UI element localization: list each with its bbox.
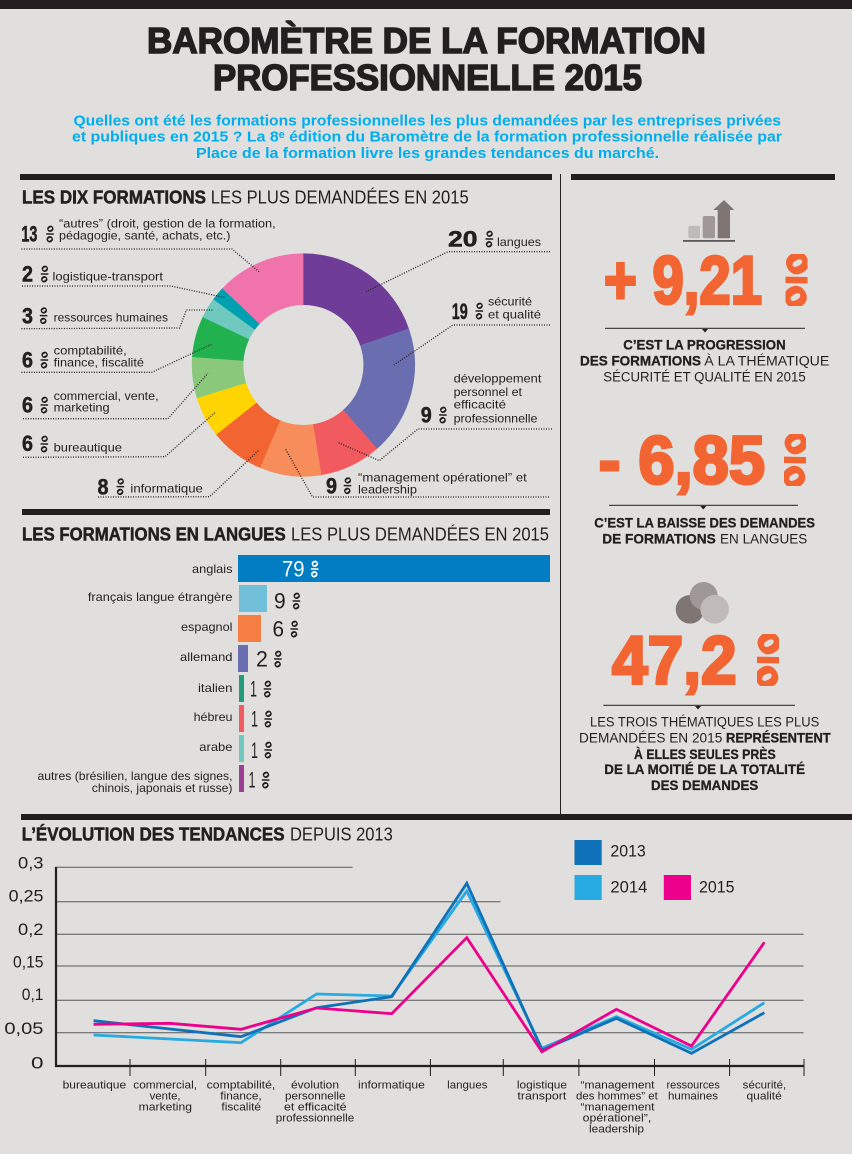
x axis labels: leadership: [589, 1123, 644, 1135]
callout: autres 13 %: “autres” (droit, gestion de la formation,: [59, 217, 276, 231]
callout: management opérationel 9 %: leadership: [358, 483, 417, 497]
callout: langues 20 %: 20: [448, 227, 478, 252]
legend: 2015: [699, 878, 734, 897]
callout: baisse: EN LANGUES: [720, 531, 807, 546]
x axis labels: et efficacité: [284, 1101, 347, 1113]
figure: 47,2 %: %: [727, 623, 805, 699]
callout: logistique-transport 2 %: logistique-transport: [52, 270, 164, 284]
callout: commercial 6 %: 6: [22, 392, 33, 417]
legend: 2013: [610, 842, 646, 861]
x axis labels: professionnelle: [276, 1112, 354, 1124]
callout: comptabilité 6 %: 6: [22, 347, 33, 372]
bar: espagnol: espagnol: [181, 620, 232, 634]
figure: +9,21 %: %: [756, 243, 834, 319]
series 2013: [94, 883, 764, 1053]
callout: développement personnel 9 %: professionnelle: [454, 411, 538, 425]
bar: arabe: 1: [251, 738, 258, 763]
callout: développement personnel 9 %: développement: [454, 372, 542, 386]
figure: -6,85 %: %: [754, 423, 832, 499]
callout: baisse: C’EST LA BAISSE DES DEMANDES: [594, 515, 815, 530]
bar: hébreu: [194, 705, 272, 732]
bar: hébreu: %: [256, 707, 280, 731]
bar: italien: [198, 675, 272, 702]
x axis labels: vente,: [150, 1090, 181, 1102]
bar: italien: %: [255, 677, 279, 701]
y axis labels: 0,25: [9, 887, 43, 906]
intro text: et publiques en 2015 ? La 8ᵉ édition du Baromètre de la formation professionnelle réalisée par: [72, 129, 782, 146]
bar: autres: 1: [248, 768, 256, 793]
heading: formations en langues: LES PLUS DEMANDÉES EN 2015: [291, 525, 549, 545]
bar: autres: [38, 765, 278, 795]
figure: -6,85 %: - 6,85: [599, 422, 765, 498]
title: BAROMÈTRE DE LA FORMATION: [147, 20, 706, 61]
callout: comptabilité 6 %: [21, 344, 211, 372]
callout: management opérationel 9 %: 9: [326, 473, 337, 498]
legend: [574, 840, 734, 900]
series 2014: [94, 891, 764, 1049]
callout: progression: [580, 328, 829, 385]
callout: comptabilité 6 %: finance, fiscalité: [54, 356, 144, 370]
callout: commercial 6 %: commercial, vente,: [54, 389, 159, 403]
donut chart: [182, 244, 425, 486]
x axis labels: informatique: [358, 1079, 425, 1091]
intro text: [72, 113, 782, 162]
callout: langues 20 %: langues: [497, 235, 541, 249]
x axis labels: commercial,: [133, 1079, 197, 1091]
bar: français langue étrangère: [88, 585, 308, 613]
title: PROFESSIONNELLE 2015: [213, 57, 642, 98]
x axis labels: bureautique: [63, 1079, 126, 1091]
y axis labels: 0,2: [18, 920, 44, 939]
bar: anglais: 79: [282, 557, 305, 582]
panel: language formations: [22, 525, 550, 795]
heading: évolution des tendances: DEPUIS 2013: [290, 825, 393, 845]
callout: autres 13 %: pédagogie, santé, achats, etc.): [59, 229, 230, 243]
x axis labels: personnelle: [285, 1090, 346, 1102]
callout: trois thématiques: DES DEMANDES: [651, 778, 758, 793]
x axis labels: langues: [447, 1079, 488, 1091]
panel: key figures: [579, 200, 834, 793]
bar: anglais: [192, 555, 550, 582]
y axis labels: 0,15: [13, 953, 44, 972]
callout: autres 13 %: 13: [21, 222, 37, 247]
callout: bureautique 6 %: 6: [22, 431, 33, 456]
x axis labels: fiscalité: [221, 1101, 261, 1113]
panel: trends since 2013: [4, 824, 804, 1135]
x axis labels: humaines: [668, 1090, 719, 1102]
figure: 47,2 %: 47,2: [612, 622, 737, 698]
callout: commercial 6 %: %: [32, 393, 56, 417]
heading: dix formations: LES PLUS DEMANDÉES EN 2015: [211, 187, 469, 207]
callout: management opérationel 9 %: [286, 449, 549, 498]
callout: autres 13 %: [21, 217, 276, 272]
callout: baisse: [594, 505, 815, 546]
x axis labels: sécurité,: [743, 1079, 786, 1091]
bar: allemand: %: [265, 647, 290, 671]
y axis labels: 0,1: [22, 985, 44, 1004]
callout: progression: C’EST LA PROGRESSION: [623, 337, 786, 352]
callout: sécurité et qualité 19 %: 19: [452, 299, 468, 324]
heading: évolution des tendances: L’ÉVOLUTION DES TENDANCES: [22, 824, 285, 845]
bar: espagnol: %: [282, 617, 306, 641]
callout: commercial 6 %: [22, 373, 208, 419]
series 2015: [94, 938, 764, 1052]
callout: sécurité et qualité 19 %: [394, 295, 550, 365]
callout: informatique 8 %: informatique: [130, 482, 203, 496]
y axis labels: 0,05: [4, 1019, 43, 1038]
y axis labels: 0: [31, 1053, 44, 1072]
bar: hébreu: 1: [251, 707, 258, 732]
callout: sécurité et qualité 19 %: et qualité: [488, 308, 541, 322]
bar: anglais: %: [302, 557, 327, 581]
heading: dix formations: [22, 187, 469, 207]
callout: sécurité et qualité 19 %: %: [467, 299, 491, 323]
intro text: Quelles ont été les formations professionnelles les plus demandées par les entreprises privées: [74, 113, 781, 130]
callout: trois thématiques: [579, 705, 831, 793]
callout: développement personnel 9 %: %: [430, 403, 455, 427]
callout: logistique-transport 2 %: %: [32, 262, 57, 286]
callout: progression: DES FORMATIONS: [580, 354, 701, 369]
y axis labels: 0,3: [18, 853, 44, 872]
bar: français langue étrangère: français langue étrangère: [88, 590, 233, 604]
x axis labels: des hommes” et: [576, 1090, 658, 1102]
callout: logistique-transport 2 %: [22, 266, 224, 298]
figure: -6,85 %: [600, 434, 806, 496]
x axis labels: évolution: [291, 1079, 339, 1091]
callout: ressources humaines 3 %: %: [31, 304, 56, 328]
bar: italien: 1: [250, 677, 257, 702]
bar: arabe: arabe: [199, 740, 233, 754]
legend: 2014: [610, 878, 647, 897]
callout: commercial 6 %: marketing: [54, 401, 110, 415]
bar: français langue étrangère: %: [284, 589, 308, 613]
callout: informatique 8 %: %: [108, 475, 132, 499]
heading: formations en langues: [22, 525, 549, 545]
callout: autres 13 %: %: [38, 222, 62, 246]
bar: arabe: %: [256, 738, 280, 762]
bar: autres: chinois, japonais et russe): [92, 781, 232, 795]
icon: three circles: [676, 582, 729, 624]
title: [147, 20, 706, 98]
callout: logistique-transport 2 %: 2: [22, 262, 33, 287]
line chart: [4, 853, 804, 1135]
x axis labels: comptabilité,: [207, 1079, 275, 1091]
callout: comptabilité 6 %: %: [32, 348, 56, 372]
callout: baisse: DE FORMATIONS: [602, 531, 716, 546]
callout: développement personnel 9 %: efficacité: [454, 398, 506, 412]
callout: progression: À LA THÉMATIQUE: [704, 354, 829, 369]
bar: anglais: anglais: [192, 562, 232, 576]
callout: trois thématiques: REPRÉSENTENT: [726, 731, 831, 746]
callout: progression: SÉCURITÉ ET QUALITÉ EN 2015: [603, 370, 806, 385]
x axis labels: “management: [580, 1079, 654, 1091]
callout: trois thématiques: LES TROIS THÉMATIQUES LES PLUS: [590, 715, 819, 730]
callout: bureautique 6 %: bureautique: [54, 441, 122, 455]
panel: top ten formations: [21, 187, 552, 499]
callout: langues 20 %: %: [477, 227, 501, 251]
bar: espagnol: [181, 615, 306, 642]
callout: ressources humaines 3 %: 3: [22, 303, 33, 328]
callout: trois thématiques: DE LA MOITIÉ DE LA TOTALITÉ: [604, 762, 805, 777]
callout: ressources humaines 3 %: ressources humaines: [54, 311, 168, 325]
bar: italien: italien: [198, 681, 232, 695]
bar: autres: autres (brésilien, langue des signes,: [38, 769, 232, 783]
x axis labels: marketing: [139, 1101, 192, 1113]
callout: développement personnel 9 %: personnel et: [454, 385, 523, 399]
bar: allemand: allemand: [180, 650, 232, 664]
callout: informatique 8 %: [98, 450, 259, 499]
bar: allemand: [180, 645, 290, 672]
y axis labels: [4, 853, 43, 1072]
callout: comptabilité 6 %: comptabilité,: [54, 344, 127, 358]
figure: +9,21 %: + 9,21: [604, 242, 762, 318]
callout: trois thématiques: À ELLES SEULES PRÈS: [634, 747, 776, 762]
x axis labels: ressources: [666, 1079, 720, 1091]
callout: sécurité et qualité 19 %: sécurité: [488, 295, 532, 309]
callout: développement personnel 9 %: [339, 372, 552, 461]
callout: management opérationel 9 %: %: [335, 474, 359, 498]
bar: arabe: [200, 735, 272, 762]
x axis labels: qualité: [746, 1090, 782, 1102]
callout: développement personnel 9 %: 9: [421, 402, 432, 427]
bar: français langue étrangère: 9: [274, 588, 286, 613]
bar: hébreu: hébreu: [194, 710, 232, 724]
heading: dix formations: LES DIX FORMATIONS: [22, 187, 206, 207]
intro text: Place de la formation livre les grandes tendances du marché.: [196, 145, 659, 162]
bar: espagnol: 6: [272, 617, 284, 642]
x axis labels: “management: [580, 1101, 654, 1113]
heading: formations en langues: LES FORMATIONS EN LANGUES: [22, 525, 286, 545]
callout: langues 20 %: [366, 227, 550, 292]
callout: bureautique 6 %: [22, 412, 216, 457]
x axis labels: transport: [517, 1090, 566, 1102]
figure: 47,2 %: [612, 634, 779, 696]
bar: autres: %: [253, 768, 278, 792]
callout: trois thématiques: DEMANDÉES EN 2015: [579, 731, 722, 746]
bar: allemand: 2: [256, 647, 268, 672]
callout: bureautique 6 %: %: [32, 432, 56, 456]
callout: management opérationel 9 %: “management opérationel” et: [358, 471, 528, 485]
callout: informatique 8 %: 8: [98, 474, 108, 499]
x axis labels: finance,: [220, 1090, 262, 1102]
x axis labels: [63, 1079, 786, 1135]
x axis labels: logistique: [517, 1079, 567, 1091]
icon: rising bars: [683, 200, 735, 242]
callout: ressources humaines 3 %: [21, 307, 212, 330]
x axis labels: opérationel”,: [583, 1112, 651, 1124]
